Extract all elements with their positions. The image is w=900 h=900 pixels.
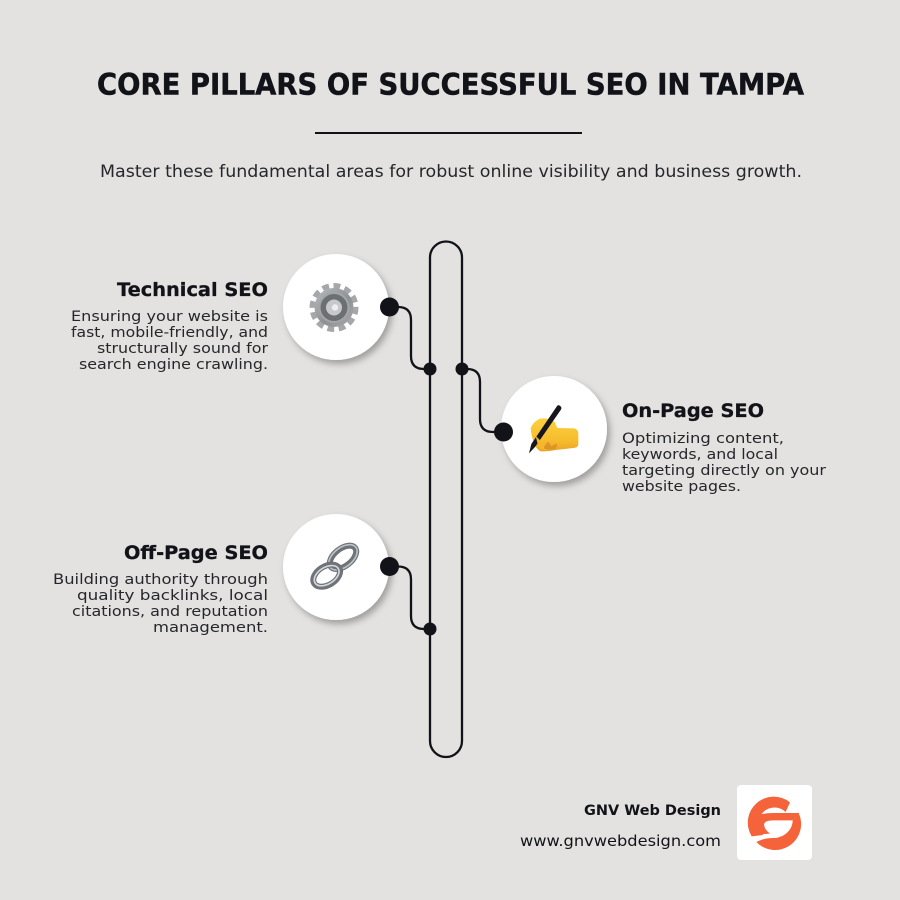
technical seo junction	[424, 362, 436, 376]
icon: writing hand	[529, 405, 578, 453]
on-page seo description	[622, 431, 826, 495]
off-page seo description: Building authority through	[53, 572, 268, 588]
central pill timeline	[430, 242, 462, 757]
on-page seo icon circle	[501, 376, 607, 482]
off-page seo icon circle	[283, 514, 389, 620]
off-page seo heading: Off-Page SEO	[124, 542, 268, 564]
on-page seo connector	[462, 369, 504, 432]
off-page seo description	[53, 572, 268, 636]
technical seo node	[380, 298, 399, 316]
logo	[737, 785, 812, 860]
on-page seo heading: On-Page SEO	[622, 400, 764, 422]
off-page seo description: management.	[153, 620, 268, 636]
icon: gear	[312, 286, 356, 329]
on-page seo description: Optimizing content,	[622, 431, 784, 447]
off-page seo junction	[424, 622, 436, 636]
technical seo heading: Technical SEO	[117, 279, 268, 301]
technical seo description: search engine crawling.	[79, 357, 268, 373]
on-page seo description: targeting directly on your	[622, 463, 826, 479]
technical seo icon circle	[283, 254, 389, 360]
panel: on-page seo	[456, 362, 826, 495]
off-page seo node	[380, 557, 399, 576]
technical seo description: Ensuring your website is	[71, 309, 268, 325]
technical seo connector	[390, 307, 430, 369]
on-page seo node	[494, 422, 513, 442]
technical seo description: fast, mobile-friendly, and	[71, 325, 268, 341]
off-page seo connector	[390, 566, 430, 629]
technical seo description	[71, 309, 268, 373]
off-page seo description: quality backlinks, local	[77, 588, 268, 604]
on-page seo description: website pages.	[622, 479, 741, 495]
title: CORE PILLARS OF SUCCESSFUL SEO IN TAMPA	[97, 68, 805, 102]
off-page seo description: citations, and reputation	[72, 604, 268, 620]
technical seo description: structurally sound for	[97, 341, 268, 357]
subtitle: Master these fundamental areas for robust online visibility and business growth.	[100, 162, 802, 182]
panel: off-page seo	[53, 514, 436, 636]
icon: chain links	[309, 540, 362, 591]
on-page seo description: keywords, and local	[622, 447, 778, 463]
footer url: www.gnvwebdesign.com	[520, 832, 721, 850]
on-page seo junction	[456, 362, 468, 376]
panel: technical seo	[71, 254, 436, 376]
footer brand name: GNV Web Design	[584, 803, 721, 819]
